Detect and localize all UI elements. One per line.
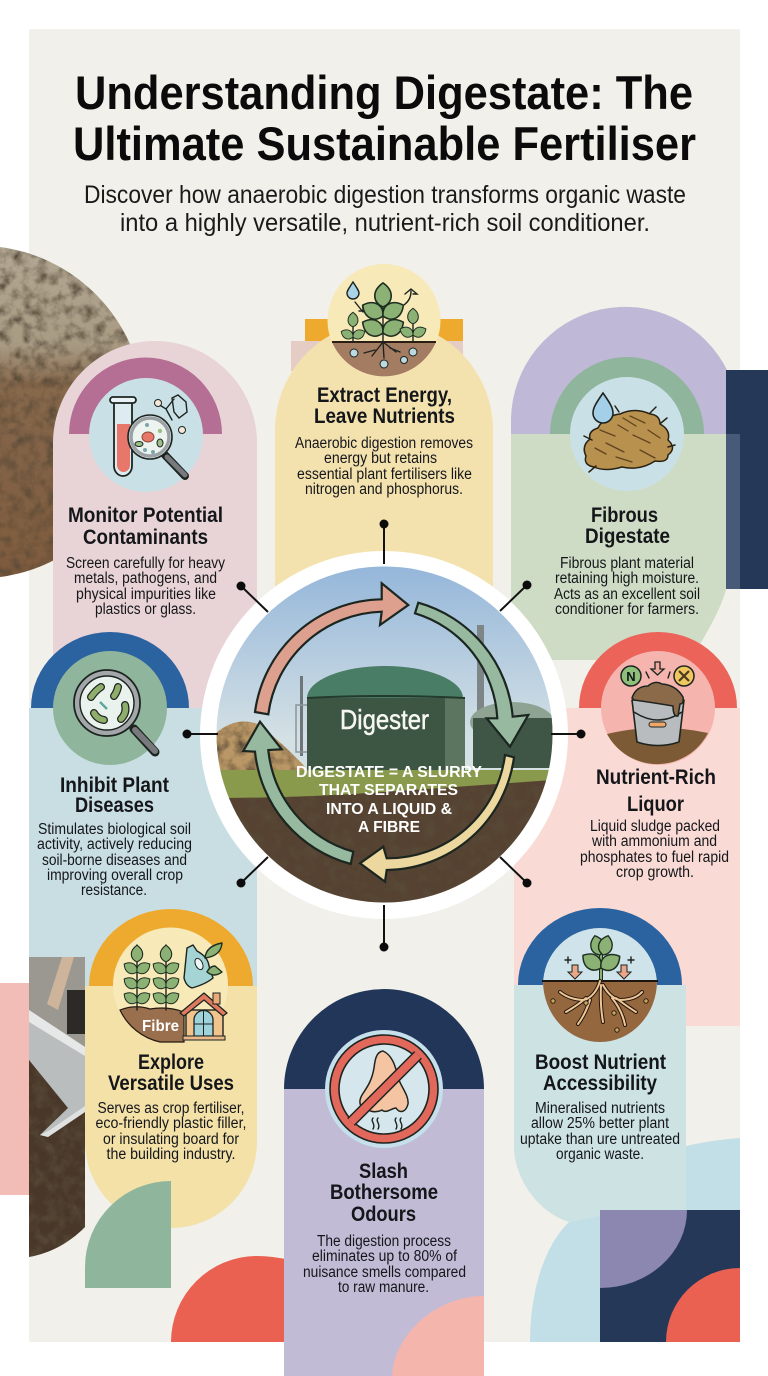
heading: Versatile Uses [108,1072,234,1095]
arrow: green left [243,722,353,864]
connectors [182,520,586,952]
text block: Mineralised nutrients [535,1100,665,1117]
title: Ultimate Sustainable Fertiliser [73,117,696,170]
pink side block [0,983,29,1195]
heading: Leave Nutrients [314,405,455,428]
text block: essential plant fertilisers like [297,466,472,483]
heading: Accessibility [543,1072,657,1095]
text block [580,818,729,881]
text block: allow 25% better plant [531,1115,670,1132]
subtitle: into a highly versatile, nutrient-rich soil conditioner. [120,209,650,237]
text block [66,555,225,618]
decorative: green quarter [85,1181,171,1288]
text block: the building industry. [106,1146,236,1163]
panel: extract energy [275,264,493,600]
decorative corner [392,1296,484,1376]
icon: plant with roots [542,928,658,1042]
photo: shovel in soil [29,957,85,1257]
arch band [284,989,484,1089]
text block: retaining high moisture. [555,570,699,587]
text block [520,1100,680,1163]
text block: physical impurities like [76,586,216,603]
panel: nutrient-rich liquor [514,632,740,1026]
text block: crop growth. [616,864,694,881]
icon: fibre pile with droplet [570,377,684,491]
heading: Liquor [627,793,684,816]
heading [330,1160,438,1226]
text block: phosphates to fuel rapid [580,849,729,866]
subtitle [84,181,686,237]
text block: uptake than ure untreated [520,1131,680,1148]
photo: biogas plant [216,564,554,910]
text block: conditioner for farmers. [555,601,699,618]
heading [585,504,670,548]
arrow: green right [415,603,528,747]
title: Understanding Digestate: The [75,66,693,119]
text block: improving overall crop [47,867,183,884]
heading: Contaminants [83,526,208,549]
text block [303,1233,466,1296]
arch band [518,908,682,985]
heading: Fibrous [591,504,658,527]
text block: nitrogen and phosphorus. [305,481,463,498]
hub caption: slurry: DIGESTATE = A SLURRY [296,764,482,781]
heading: Slash [359,1160,408,1183]
heading: Digestate [585,525,670,548]
text block [37,821,192,899]
text block: eco-friendly plastic filler, [96,1115,246,1132]
panel: slash bothersome odours [284,989,484,1376]
text block: or insulating board for [103,1131,239,1148]
heading [108,1051,234,1095]
icon: plants and soil [328,264,440,377]
text block: Serves as crop fertiliser, [98,1100,244,1117]
text block [295,435,473,498]
text block: Liquid sludge packed [590,818,720,835]
hub caption: slurry: A FIBRE [358,819,420,836]
navy block [726,370,768,589]
subtitle: Discover how anaerobic digestion transforms organic waste [84,181,686,209]
text block: Screen carefully for heavy [66,555,225,572]
icon: bucket of sludge: N [626,669,636,684]
text block: nuisance smells compared [303,1264,466,1281]
heading: Odours [351,1203,416,1226]
heading: Nutrient-Rich [596,766,716,789]
text block: Anaerobic digestion removes [295,435,473,452]
icon: crops, bottle and house [113,928,228,1042]
arrow: yellow [360,755,514,882]
text block: organic waste. [556,1146,644,1163]
heading: Boost Nutrient [535,1051,666,1074]
heading: Monitor Potential [68,504,223,527]
icon: test tube and magnifier [89,378,203,492]
title [73,66,696,170]
text block: energy but retains [324,450,437,467]
heading [596,766,716,816]
heading [68,504,223,549]
text block [554,555,700,618]
heading: Inhibit Plant [60,774,169,797]
heading: Extract Energy, [317,384,452,407]
text block [96,1100,246,1163]
text block: metals, pathogens, and [74,570,217,587]
heading: Bothersome [330,1181,438,1204]
hub caption: slurry: INTO A LIQUID & [326,801,452,818]
hub label: digester: Digester [340,704,429,735]
panel: boost nutrient accessibility [514,908,686,1222]
text block: plastics or glass. [95,601,196,618]
decorative: coral quarter [171,1256,290,1342]
hub caption: slurry: THAT SEPARATES [319,782,458,799]
arch band [69,358,222,434]
text block: activity, actively reducing [37,836,192,853]
decorative: lower-right shapes [530,1138,740,1342]
central hub: digester [200,551,568,919]
icon label: Fibre [142,1018,179,1035]
arch band [89,909,253,986]
text block: to raw manure. [338,1279,429,1296]
panel: monitor potential contaminants [53,341,257,708]
arch band [579,632,737,708]
text block: Fibrous plant material [560,555,694,572]
text block: Acts as an excellent soil [554,586,700,603]
panel: fibrous digestate [511,307,768,660]
icon: magnifier with bacteria [53,651,167,765]
text block: with ammonium and [591,833,717,850]
photo: soil circle [0,246,144,578]
arch band [31,632,189,708]
heading [314,384,455,428]
heading [60,774,169,817]
text block: Stimulates biological soil [38,821,191,838]
heading: Diseases [75,794,154,817]
text block: eliminates up to 80% of [312,1248,458,1265]
arrow: pink [255,583,408,714]
panel: inhibit plant diseases [29,632,257,998]
text block: The digestion process [317,1233,451,1250]
arch band [550,357,704,434]
icon: crossed-out nose [325,1030,443,1148]
text block: resistance. [81,882,147,899]
decorative blocks behind extract card [291,319,463,371]
text block: soil-borne diseases and [42,852,187,869]
hub caption: slurry [296,764,482,836]
icon: bucket of sludge [601,651,715,765]
heading: Explore [138,1051,204,1074]
panel: explore versatile uses [85,909,257,1228]
heading [535,1051,666,1095]
